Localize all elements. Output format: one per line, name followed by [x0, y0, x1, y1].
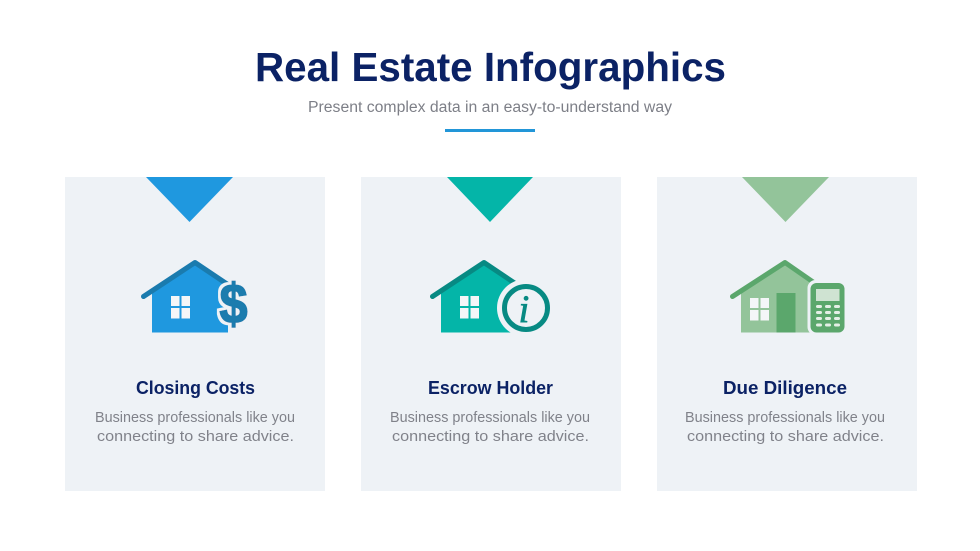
- triangle marker: closing costs: [146, 177, 233, 222]
- heading: closing costs: Closing Costs: [136, 377, 255, 398]
- icon: house with dollar sign: $: [220, 272, 248, 335]
- title: Real Estate Infographics: [255, 44, 726, 90]
- icon: house with info symbol: i: [518, 288, 529, 331]
- heading: due diligence: Due Diligence: [723, 377, 847, 398]
- description: due diligence: [685, 409, 885, 445]
- icon: house with dollar sign: [144, 262, 248, 335]
- triangle marker: due diligence: [742, 177, 829, 222]
- title underline: [445, 129, 535, 132]
- description: escrow holder: connecting to share advice.: [392, 428, 589, 445]
- panel: closing costs: [65, 177, 325, 491]
- panel: escrow holder: [361, 177, 621, 491]
- description: escrow holder: Business professionals like you: [390, 409, 590, 426]
- icon: house with calculator: [732, 262, 848, 335]
- subtitle: Present complex data in an easy-to-understand way: [308, 99, 672, 116]
- description: due diligence: Business professionals like you: [685, 409, 885, 426]
- description: escrow holder: [390, 409, 590, 445]
- panel: due diligence: [657, 177, 917, 491]
- heading: escrow holder: Escrow Holder: [428, 377, 553, 398]
- description: closing costs: connecting to share advice.: [97, 428, 294, 445]
- description: closing costs: [95, 409, 295, 445]
- triangle marker: escrow holder: [447, 177, 533, 222]
- description: closing costs: Business professionals like you: [95, 409, 295, 426]
- icon: house with info symbol: [432, 262, 555, 337]
- description: due diligence: connecting to share advice.: [687, 428, 884, 445]
